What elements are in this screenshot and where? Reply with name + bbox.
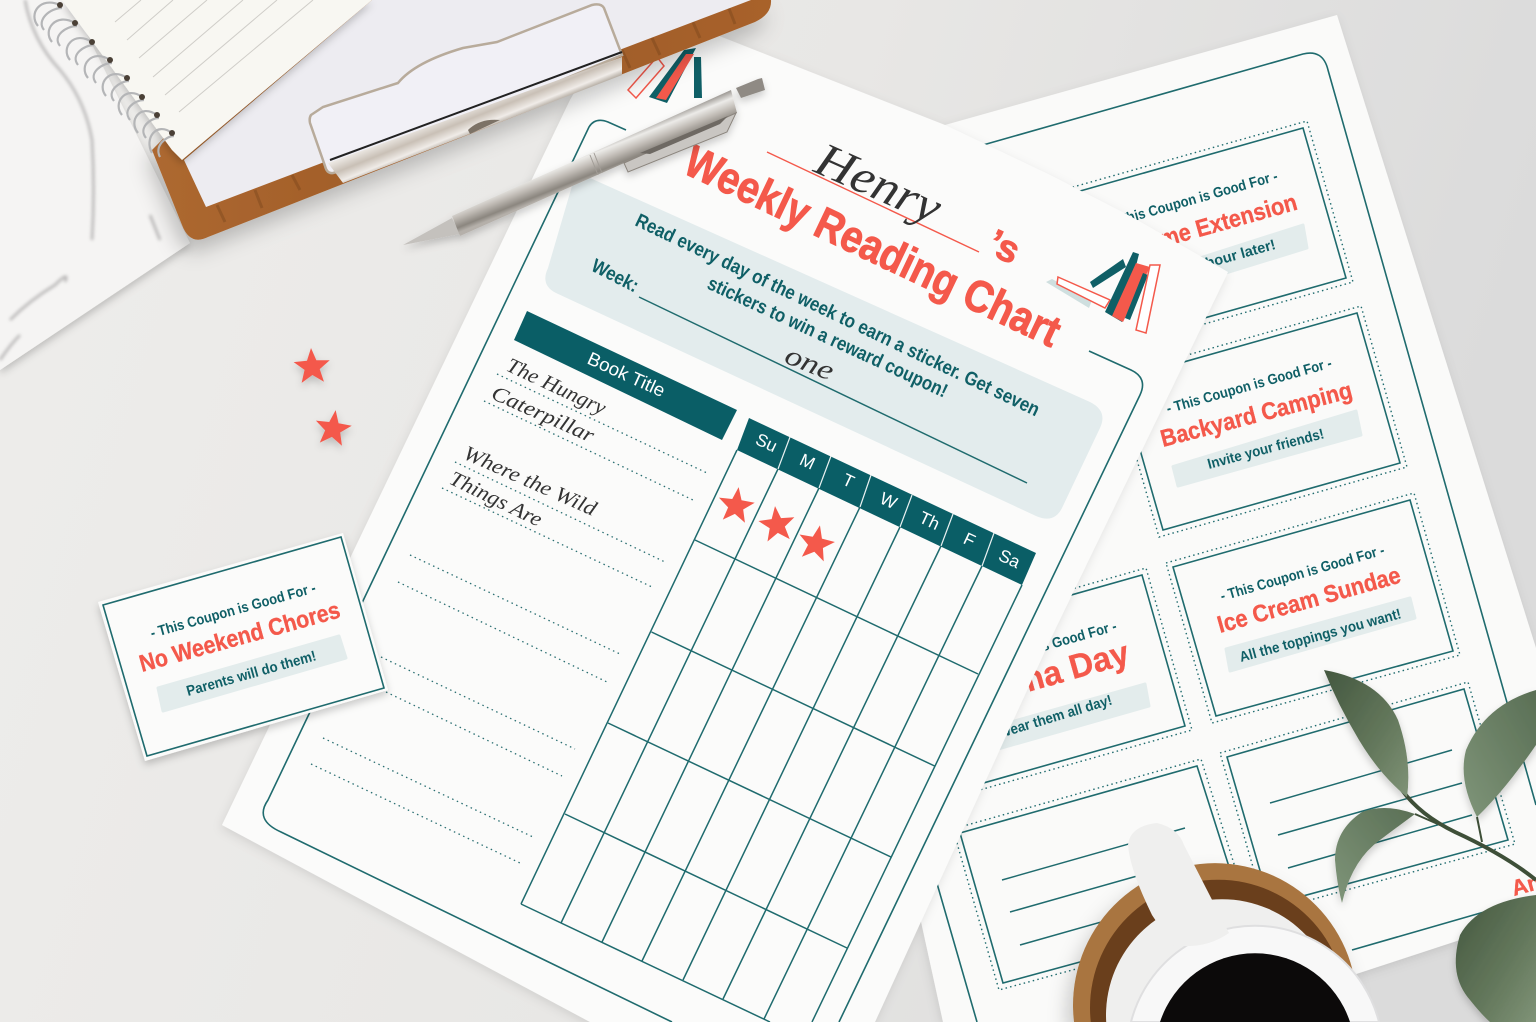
icon: book stack top	[628, 48, 702, 103]
plant leaves	[1324, 670, 1536, 1022]
cup handle	[1128, 823, 1229, 946]
cork coaster	[1073, 863, 1357, 1022]
day header row: Th	[916, 507, 943, 534]
handwritten titles	[446, 353, 611, 531]
panel: weekly reading chart sheet	[222, 0, 1228, 1022]
instructions box	[545, 176, 1102, 519]
handwritten titles: Caterpillar	[488, 381, 599, 448]
coupon: backyard camping: Backyard Camping	[1158, 377, 1355, 453]
spiral notebook	[34, 0, 372, 160]
coupon: blank right	[1220, 682, 1515, 912]
panel: coupon sheet	[898, 15, 1536, 1022]
inner frame	[263, 120, 1143, 1022]
instructions text: stickers to win a reward coupon!	[704, 273, 951, 402]
handwritten titles: Things Are	[446, 466, 546, 531]
title: Weekly Reading Chart	[677, 135, 1069, 357]
stickers: stars	[716, 485, 838, 563]
coupon: time extension	[1059, 121, 1353, 352]
coupon: time extension: - This Coupon is Good For -	[1110, 169, 1280, 231]
icon: book stack	[1046, 252, 1160, 333]
day header row: M	[797, 449, 818, 474]
instructions text: Read every day of the week to earn a sticker. Get seven	[632, 210, 1043, 421]
notepad clip	[310, 4, 622, 183]
leaf	[1324, 670, 1408, 797]
loose star stickers	[293, 347, 354, 447]
title possessive: ’s	[981, 222, 1026, 273]
saucer	[1106, 899, 1338, 1022]
clipboard paper	[184, 0, 751, 207]
panel: single coupon: Parents will do them!	[185, 648, 318, 700]
handwritten week: one	[780, 340, 838, 387]
stem	[1402, 790, 1536, 880]
week label: Week:	[588, 255, 642, 297]
week line	[639, 297, 1027, 483]
day header row: F	[960, 528, 979, 551]
coupon: time extension: Stay up an hour later!	[1129, 237, 1278, 293]
coupon: backyard camping	[1113, 306, 1407, 537]
coupon: backyard camping: Invite your friends!	[1206, 426, 1326, 473]
coupon: ice cream sundae: All the toppings you want!	[1238, 606, 1403, 666]
leaf	[1464, 690, 1536, 817]
day header row: W	[877, 488, 901, 513]
marble surface	[0, 0, 190, 370]
handwritten name: Henry	[807, 132, 950, 235]
clipboard	[152, 0, 771, 240]
panel: single coupon: No Weekend Chores	[136, 597, 343, 678]
day header row: T	[839, 469, 858, 492]
coupon: ice cream sundae: Ice Cream Sundae	[1214, 562, 1404, 639]
coupon: pajama day: - This Coupon is Good For -	[949, 619, 1119, 681]
leaf	[1456, 895, 1536, 1022]
coupon: blank left	[953, 759, 1252, 990]
coupon: pajama day: Pajama Day	[945, 634, 1133, 721]
panel: single coupon: - This Coupon is Good For -	[149, 580, 318, 642]
coffee cup on cork coaster	[1073, 823, 1379, 1022]
coffee	[1160, 953, 1350, 1022]
book title header: Book Title	[584, 348, 669, 401]
day header row: Sa	[996, 545, 1024, 572]
coupon: backyard camping: - This Coupon is Good For -	[1165, 356, 1334, 417]
coupon: pajama day	[898, 568, 1192, 800]
coupon: ice cream sundae: - This Coupon is Good For -	[1219, 543, 1387, 605]
title name line	[767, 152, 979, 252]
book title lines	[311, 374, 707, 863]
reading grid	[521, 450, 1022, 1022]
book title header	[514, 311, 737, 440]
leaf	[1335, 808, 1415, 903]
mechanical pen	[403, 78, 765, 245]
coupon: ice cream sundae	[1166, 493, 1460, 723]
cup rim	[1131, 926, 1379, 1022]
day header row: Su	[753, 429, 780, 456]
handwritten titles: The Hungry	[503, 353, 611, 420]
coupon: time extension: Playtime Extension	[1100, 189, 1300, 269]
day header row	[737, 418, 1036, 585]
panel: single coupon	[98, 533, 388, 761]
coupon: pajama day: Wear them all day!	[997, 693, 1114, 742]
handwritten titles: Where the Wild	[460, 441, 601, 521]
spiral rings	[34, 3, 174, 157]
